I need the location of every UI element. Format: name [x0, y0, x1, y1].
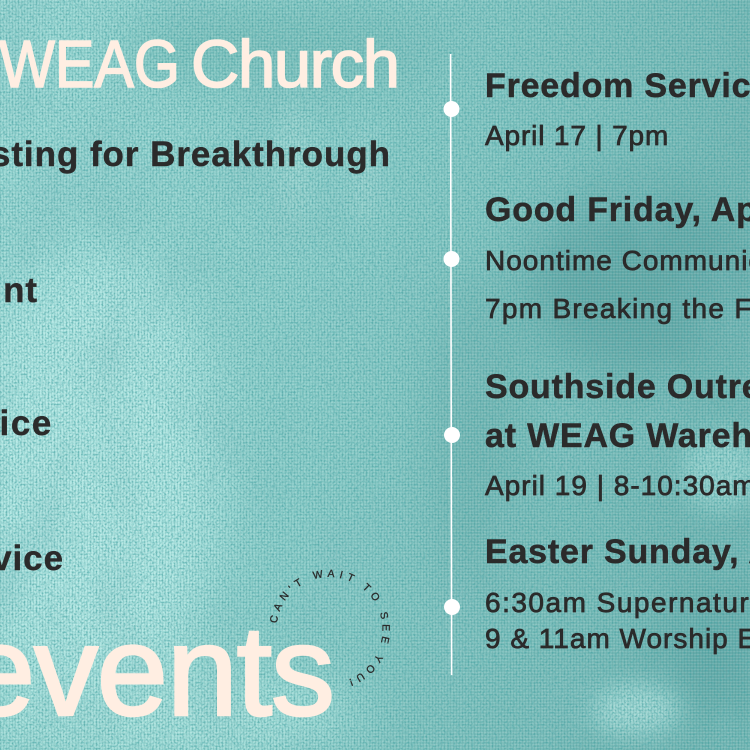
- timeline dot: Freedom Service: [444, 101, 460, 117]
- timeline dot: Good Friday: [444, 251, 460, 267]
- event: Freedom Service: [485, 67, 750, 151]
- title: WEAG Church: Church: [191, 27, 400, 102]
- event: Southside Outreach: [485, 368, 750, 501]
- event: Easter Sunday: [485, 533, 750, 654]
- title: WEAG Church: [0, 27, 400, 102]
- title: WEAG Church: WEAG: [0, 27, 180, 102]
- event: Freedom Service: April 17 | 7pm: [485, 120, 669, 151]
- circular badge text: CAN'T WAIT TO SEE YOU!: [270, 570, 390, 686]
- event: Good Friday: [485, 191, 750, 324]
- left list: item ending in nt: nt: [3, 271, 38, 310]
- timeline: [444, 54, 460, 675]
- timeline dot: Easter Sunday: [444, 599, 460, 615]
- event: Southside Outreach: April 19 | 8-10:30am: [485, 470, 750, 501]
- timeline dot: Southside Outreach: [444, 427, 460, 443]
